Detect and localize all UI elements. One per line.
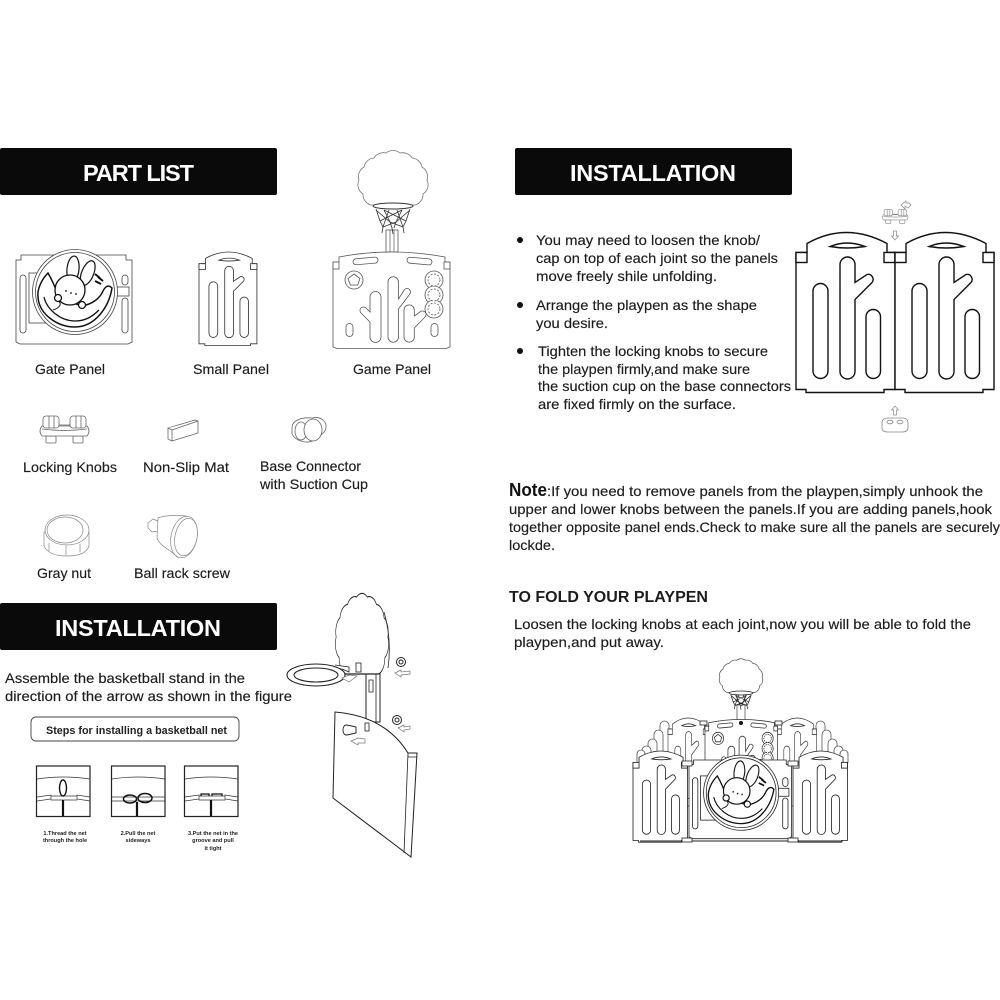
label: small panel: Small Panel xyxy=(193,361,269,377)
text: assemble instructions xyxy=(5,670,292,704)
label: locking knobs: Locking Knobs xyxy=(23,459,117,475)
text: installation bullet 1 xyxy=(517,232,778,284)
heading: basketball installation: INSTALLATION xyxy=(55,615,221,641)
icon: net step 3 xyxy=(184,766,238,816)
caption: net step 1: through the hole xyxy=(43,838,87,844)
label: game panel: Game Panel xyxy=(353,361,431,377)
icon: ball rack screw xyxy=(148,514,201,560)
label: base connector with suction cup: Base Connector xyxy=(260,458,361,474)
text: installation bullet 2: Arrange the playpen as the shape xyxy=(536,297,757,313)
heading: basketball installation xyxy=(0,603,277,650)
text: installation bullet 2 xyxy=(517,297,757,331)
illustration: basketball stand assembly xyxy=(287,593,417,857)
icon: small panel xyxy=(199,252,257,346)
text: note: together opposite panel ends.Check to make sure all the panels are securely xyxy=(509,519,1000,535)
text: installation bullet 2: you desire. xyxy=(536,315,608,331)
icon: game panel with basketball hoop xyxy=(333,150,450,348)
label: gate panel: Gate Panel xyxy=(35,361,105,377)
label: base connector with suction cup: with Suction Cup xyxy=(259,476,368,492)
heading: part list xyxy=(0,148,277,195)
text: installation bullet 1: You may need to loosen the knob/ xyxy=(536,232,760,248)
text: installation bullet 3: are fixed firmly on the surface. xyxy=(538,396,736,412)
text: installation bullet 3 xyxy=(517,343,791,412)
label: gray nut: Gray nut xyxy=(37,565,91,581)
text: assemble instructions: Assemble the basketball stand in the xyxy=(5,670,245,686)
text: installation bullet 3: the suction cup on the base connectors xyxy=(538,378,791,394)
text: fold instructions: playpen,and put away. xyxy=(514,634,664,650)
text: note: lockde. xyxy=(509,537,555,553)
icon: locking knobs xyxy=(40,416,89,443)
text: installation bullet 1: cap on top of each joint so the panels xyxy=(536,250,778,266)
text: installation bullet 3: Tighten the locking knobs to secure xyxy=(538,343,768,359)
text: note: upper and lower knobs between the panels.If you are adding panels,hook xyxy=(509,501,993,517)
icon: net step 1 xyxy=(36,766,90,816)
text: note: Note xyxy=(509,480,547,500)
heading: panel installation: INSTALLATION xyxy=(570,160,736,186)
caption: net step 3: groove and pull xyxy=(192,838,234,844)
illustration: assembled playpen xyxy=(633,659,848,842)
callout: net installation steps xyxy=(31,717,239,741)
label: non-slip mat: Non-Slip Mat xyxy=(143,459,229,475)
caption: net step 3: it tight xyxy=(204,846,222,852)
icon: gray nut xyxy=(44,515,89,556)
icon: non-slip mat xyxy=(168,420,198,441)
caption: net step 2: sideways xyxy=(126,838,150,844)
text: note: :If you need to remove panels from the playpen,simply unhook the xyxy=(547,483,983,499)
caption: net step 3: 3.Put the net in the xyxy=(188,831,238,837)
caption: net step 1: 1.Thread the net xyxy=(43,831,87,837)
caption: net step 2: 2.Pull the net xyxy=(121,831,156,837)
illustration: two panels joined with knob and base xyxy=(796,201,994,432)
icon: base connector with suction cup xyxy=(292,418,326,442)
label: base connector with suction cup xyxy=(259,458,368,492)
text: note xyxy=(509,480,1000,553)
text: installation bullet 3: the playpen firmly,and make sure xyxy=(538,361,750,377)
label: ball rack screw: Ball rack screw xyxy=(134,565,231,581)
icon: net step 2 xyxy=(112,766,165,816)
caption: net step 1 xyxy=(43,831,87,844)
text: assemble instructions: direction of the arrow as shown in the figure xyxy=(5,688,292,704)
caption: net step 2 xyxy=(121,831,156,844)
text: installation bullet 1: move freely shile unfolding. xyxy=(536,268,717,284)
heading: part list: PART LIST xyxy=(83,160,195,186)
icon: gate panel xyxy=(16,250,132,344)
text: fold instructions xyxy=(514,616,971,650)
text: fold instructions: Loosen the locking knobs at each joint,now you will be able to fold the xyxy=(514,616,971,632)
heading: to fold your playpen: TO FOLD YOUR PLAYPEN xyxy=(509,589,708,606)
caption: net step 3 xyxy=(188,831,238,852)
heading: panel installation xyxy=(515,148,792,195)
callout: net installation steps: Steps for installing a basketball net xyxy=(46,725,227,737)
